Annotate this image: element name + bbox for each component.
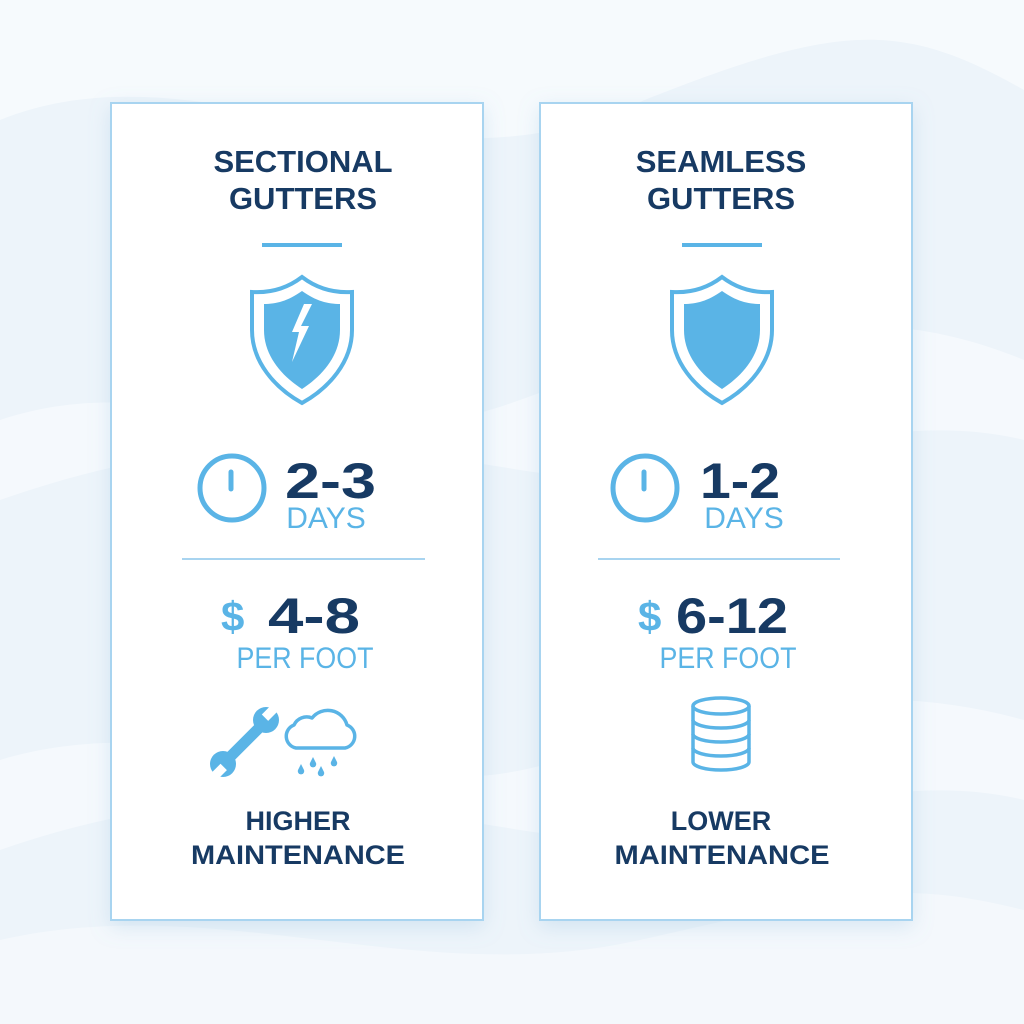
text: 1-2 days: DAYS — [704, 502, 784, 535]
icon: coin stack — [693, 698, 749, 770]
text: 2-3 days — [285, 453, 376, 535]
text: 1-2 days: 1-2 — [700, 453, 780, 509]
heading: sectional gutters — [213, 144, 393, 216]
text: higher maintenance: MAINTENANCE — [191, 840, 405, 870]
heading: seamless gutters: GUTTERS — [647, 181, 795, 216]
icon: shield — [672, 277, 772, 403]
heading: sectional gutters: SECTIONAL — [213, 144, 393, 179]
text: higher maintenance — [191, 806, 405, 870]
text: price 6-12 per foot: PER FOOT — [660, 642, 796, 675]
text: higher maintenance: HIGHER — [245, 806, 351, 836]
text: price 6-12 per foot — [638, 588, 796, 675]
text: price 4-8 per foot: 4-8 — [268, 588, 360, 644]
heading: sectional gutters: GUTTERS — [229, 181, 377, 216]
text: 2-3 days: 2-3 — [285, 453, 376, 509]
text: price 4-8 per foot: $ — [221, 593, 244, 640]
icon: wrench — [208, 702, 281, 783]
text: price 4-8 per foot: PER FOOT — [236, 642, 374, 675]
icon: rain cloud — [286, 710, 355, 776]
icon: shield with lightning — [252, 277, 352, 403]
text: lower maintenance: MAINTENANCE — [614, 840, 830, 870]
heading: seamless gutters: SEAMLESS — [636, 144, 806, 179]
text: price 6-12 per foot: $ — [638, 593, 661, 640]
panel: sectional gutters — [111, 103, 483, 920]
text: 1-2 days — [700, 453, 784, 535]
icon: clock — [613, 456, 677, 520]
icon: clock — [200, 456, 264, 520]
text: price 6-12 per foot: 6-12 — [676, 588, 788, 644]
text: price 4-8 per foot — [221, 588, 374, 675]
heading: seamless gutters — [636, 144, 806, 216]
text: lower maintenance — [614, 806, 830, 870]
panel: seamless gutters — [540, 103, 912, 920]
text: lower maintenance: LOWER — [671, 806, 771, 836]
text: 2-3 days: DAYS — [286, 502, 366, 535]
